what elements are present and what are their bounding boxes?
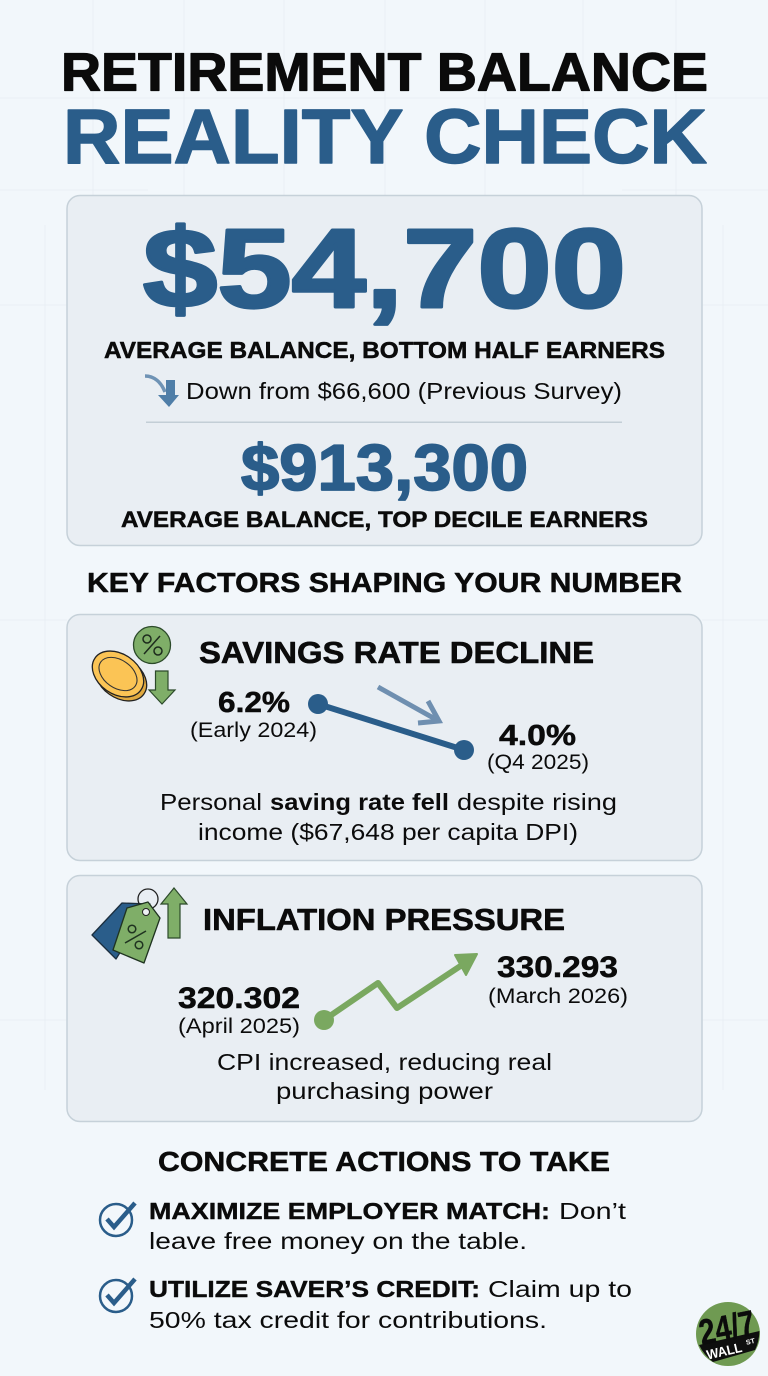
heading: inflation pressure: INFLATION PRESSURE — [203, 903, 565, 937]
icon: price tags and up arrow — [92, 888, 187, 963]
label: bottom half: AVERAGE BALANCE, BOTTOM HALF EARNERS — [104, 337, 665, 363]
savings description: saving rate fell — [270, 789, 449, 815]
title — [61, 42, 708, 180]
value: 6.2%: 6.2% — [218, 687, 290, 719]
action: saver's credit: Claim up to — [488, 1276, 632, 1302]
savings description — [160, 789, 617, 845]
previous survey text: Down from $66,600 (Previous Survey) — [186, 378, 622, 404]
value: 320.302: 320.302 — [178, 982, 300, 1015]
big number: bottom half: $54,700 — [143, 206, 626, 331]
icon: check — [100, 1279, 135, 1312]
action: saver's credit — [100, 1276, 632, 1333]
title line 1: RETIREMENT BALANCE — [61, 42, 708, 102]
value: 330.293: 330.293 — [497, 951, 618, 984]
date: april 2025: (April 2025) — [178, 1014, 300, 1038]
title line 2: REALITY CHECK — [63, 94, 707, 180]
icon: check — [100, 1203, 135, 1236]
big number: top decile: $913,300 — [241, 431, 528, 504]
inflation description: purchasing power — [276, 1078, 493, 1104]
logo: 24/7 Wall St: ST — [745, 1338, 756, 1347]
value: 4.0%: 4.0% — [499, 720, 576, 752]
panel: balances — [67, 196, 702, 546]
panel: inflation pressure — [67, 876, 702, 1122]
icon: coin, percent and down arrow — [84, 626, 175, 710]
action: saver's credit: 50% tax credit for contributions. — [149, 1307, 547, 1333]
action: employer match — [100, 1198, 627, 1254]
logo: 24/7 Wall St — [696, 1302, 760, 1366]
icon: down arrow — [145, 376, 179, 407]
date: march 2026: (March 2026) — [488, 984, 628, 1008]
savings description: income ($67,648 per capita DPI) — [198, 819, 578, 845]
heading: savings rate decline: SAVINGS RATE DECLINE — [199, 636, 594, 670]
heading: key factors: KEY FACTORS SHAPING YOUR NUMBER — [87, 567, 682, 598]
action: employer match: Don’t — [559, 1198, 627, 1224]
date: early 2024: (Early 2024) — [190, 718, 317, 742]
inflation description — [217, 1049, 552, 1104]
line chart: rising CPI — [314, 954, 477, 1030]
logo: 24/7 Wall St: WALL — [705, 1340, 744, 1363]
panel: savings rate decline — [67, 614, 702, 860]
action: saver's credit: UTILIZE SAVER’S CREDIT: — [149, 1276, 480, 1302]
heading: concrete actions: CONCRETE ACTIONS TO TAKE — [158, 1146, 610, 1177]
line chart: decline — [308, 694, 474, 760]
action: employer match: MAXIMIZE EMPLOYER MATCH: — [149, 1198, 550, 1224]
date: Q4 2025: (Q4 2025) — [487, 750, 589, 774]
action: employer match: leave free money on the table. — [149, 1228, 527, 1254]
arrow: downward trend — [378, 687, 439, 723]
savings description: Personal — [160, 789, 262, 815]
inflation description: CPI increased, reducing real — [217, 1049, 552, 1075]
label: top decile: AVERAGE BALANCE, TOP DECILE EARNERS — [121, 507, 648, 532]
savings description: despite rising — [457, 789, 617, 815]
